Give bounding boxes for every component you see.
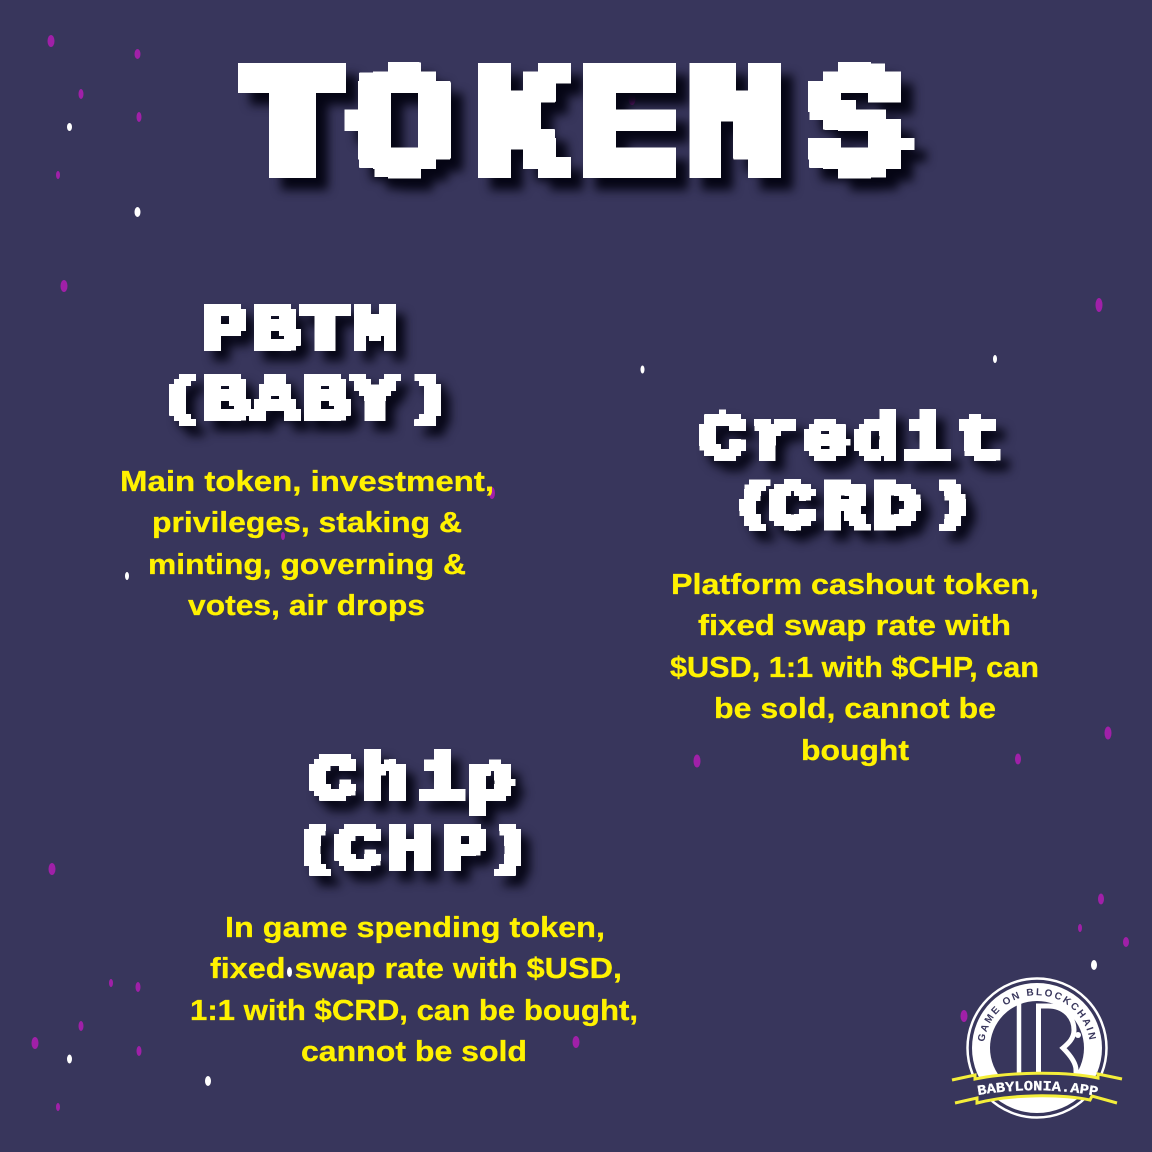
body text: Chip description: In game spending token, xyxy=(225,912,605,944)
heading: Credit (CRD): ) xyxy=(936,481,970,533)
body text: Credit description: be sold, cannot be xyxy=(714,693,996,725)
heading: PBTM (BABY): ( xyxy=(164,374,198,426)
body text: PBTM description: minting, governing & xyxy=(148,549,466,581)
heading: PBTM (BABY): BABY xyxy=(201,366,400,438)
panel: PBTM token xyxy=(120,296,494,622)
body text: PBTM description: privileges, staking & xyxy=(152,507,462,539)
body text: PBTM description: votes, air drops xyxy=(188,590,425,622)
heading: PBTM (BABY) xyxy=(164,296,448,438)
logo ring xyxy=(968,978,1106,1118)
logo arc text: GAME ON BLOCKCHAIN xyxy=(978,988,1096,1041)
heading: Credit (CRD): Credit xyxy=(699,404,1003,476)
heading: PBTM (BABY): PBTM xyxy=(201,296,399,368)
heading: Chip (CHP): Chip xyxy=(309,745,515,817)
body text: Credit description xyxy=(670,569,1039,767)
title: TOKENS xyxy=(242,46,909,216)
body text: Chip description: cannot be sold xyxy=(301,1036,527,1068)
body text: Credit description: bought xyxy=(801,735,909,767)
heading: Chip (CHP): ) xyxy=(494,823,528,875)
logo ribbon xyxy=(952,1073,1122,1103)
panel: Credit token xyxy=(670,404,1039,767)
body text: Chip description: fixed swap rate with $USD, xyxy=(210,953,622,985)
logo: Babylonia badge xyxy=(952,977,1122,1119)
body text: PBTM description xyxy=(120,466,494,622)
heading: Chip (CHP): CHP xyxy=(334,815,489,887)
heading: PBTM (BABY): ) xyxy=(414,374,448,426)
heading: Chip (CHP) xyxy=(296,745,528,887)
heading: Credit (CRD): ( xyxy=(735,481,770,533)
heading: Credit (CRD) xyxy=(699,404,1003,545)
body text: Chip description xyxy=(190,912,638,1068)
body text: Credit description: $USD, 1:1 with $CHP, can xyxy=(670,652,1039,684)
body text: Credit description: Platform cashout token, xyxy=(671,569,1039,601)
heading: Chip (CHP): ( xyxy=(296,823,331,875)
panel: Chip token xyxy=(190,745,638,1068)
logo ribbon text: BABYLONIA.APP xyxy=(977,1080,1098,1096)
body text: Credit description: fixed swap rate with xyxy=(698,610,1011,642)
logo monogram xyxy=(1019,1003,1081,1080)
body text: Chip description: 1:1 with $CRD, can be bought, xyxy=(190,995,638,1027)
body text: PBTM description: Main token, investment, xyxy=(120,466,494,498)
heading: Credit (CRD): CRD xyxy=(768,473,920,545)
